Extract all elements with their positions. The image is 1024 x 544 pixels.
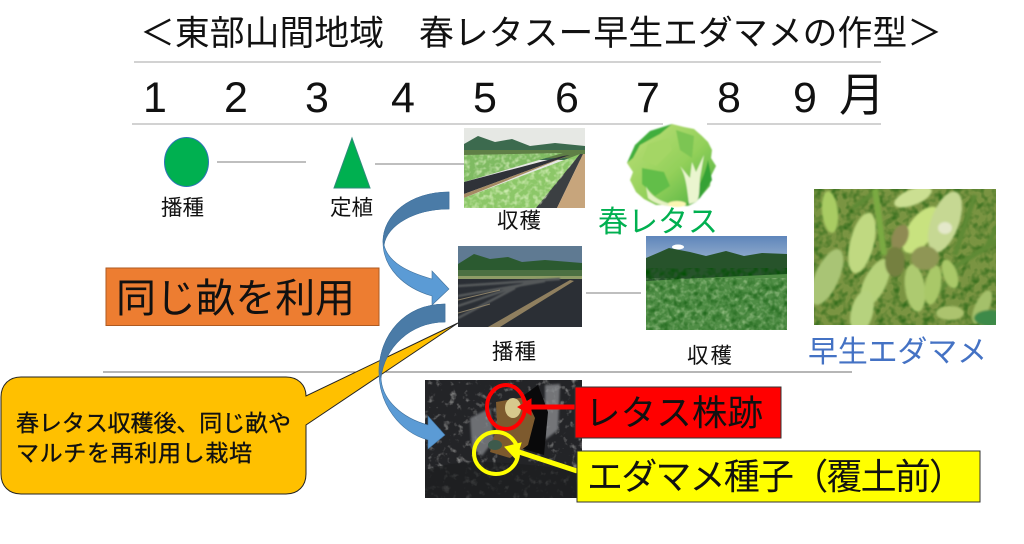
month axis: 1 <box>143 74 167 122</box>
label box: lettuce stump <box>575 387 781 438</box>
orange box: same field reuse: 同じ畝を利用 <box>116 277 355 321</box>
red circle and arrow: lettuce stump <box>487 385 575 429</box>
photo: lettuce field harvest <box>464 128 585 208</box>
sowing marker: green circle <box>164 138 208 186</box>
label: early edamame: 早生エダマメ <box>808 336 987 369</box>
callout: reuse after lettuce harvest: 春レタス収穫後、同じ畝や <box>16 410 291 436</box>
callout: reuse after lettuce harvest: マルチを再利用し栽培 <box>16 440 252 466</box>
photo: edamame pods <box>814 189 996 325</box>
month axis: 2 <box>224 74 248 122</box>
month axis: 5 <box>473 74 497 122</box>
month axis: 7 <box>636 74 660 122</box>
photo: edamame field harvest <box>646 236 787 330</box>
divider <box>103 371 852 373</box>
sowing label: 播種 <box>161 196 204 220</box>
photo: mulch planting hole <box>425 380 582 498</box>
transplanting marker: green triangle <box>334 138 370 188</box>
label box: edamame seed before covering: エダマメ種子（覆土前） <box>587 456 965 497</box>
month axis: 4 <box>391 74 415 122</box>
month axis: 月 <box>839 69 885 121</box>
connector line <box>375 163 464 165</box>
curved arrow: lettuce field to edamame sowing <box>383 192 449 305</box>
photo: mulch sowing field <box>458 246 582 327</box>
curved arrow: edamame field to planting detail <box>379 304 445 449</box>
title: ＜東部山間地域 春レタスー早生エダマメの作型＞ <box>140 14 942 53</box>
label: harvest: 収穫 <box>687 344 732 368</box>
orange box: same field reuse <box>106 268 379 326</box>
callout: reuse after lettuce harvest <box>1 323 458 494</box>
connector line <box>217 161 306 163</box>
label: harvest: 収穫 <box>497 209 541 233</box>
transplanting label: 定植 <box>330 196 373 220</box>
month axis: 6 <box>555 74 579 122</box>
yellow circle and arrow: edamame seed <box>474 432 577 474</box>
label box: lettuce stump: レタス株跡 <box>585 393 763 433</box>
connector line <box>586 292 641 294</box>
month axis: 9 <box>793 74 817 122</box>
label: spring lettuce: 春レタス <box>598 206 718 239</box>
month axis <box>132 62 885 124</box>
month axis: 8 <box>717 74 741 122</box>
month axis: 3 <box>305 74 329 122</box>
icon: lettuce <box>627 124 716 207</box>
label: sowing: 播種 <box>492 340 536 364</box>
